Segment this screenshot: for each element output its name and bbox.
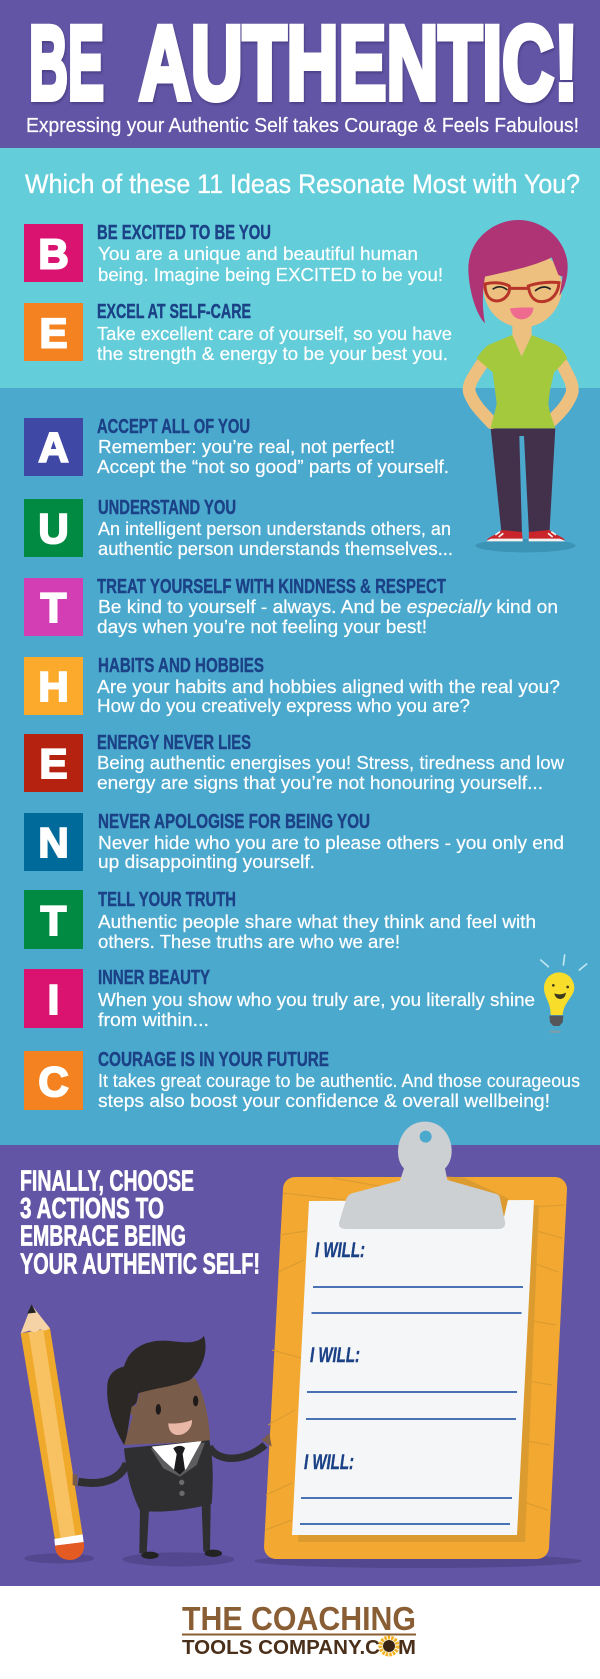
item: H: Are your habits and hobbies aligned with the real you? [97, 677, 560, 697]
item: T: T [41, 584, 67, 631]
item: N: N [38, 819, 69, 866]
item: E: ENERGY NEVER LIES [97, 731, 251, 754]
icon: light bulb [541, 955, 587, 1033]
heading: finally choose 3 actions: FINALLY, CHOOSE [20, 1166, 194, 1198]
item: T [24, 575, 558, 637]
item: C: C [38, 1058, 69, 1105]
paper sheet [292, 1200, 534, 1535]
item: T: T [41, 897, 67, 944]
item: E: Take excellent care of yourself, so you have [97, 324, 452, 344]
panel: header [0, 0, 600, 148]
icon: clipboard [254, 1122, 582, 1568]
item: T: others. These truths are who we are! [98, 932, 400, 952]
clip [339, 1122, 508, 1229]
item: T: TREAT YOURSELF WITH KINDNESS & RESPECT [97, 575, 446, 598]
item: A: Accept the “not so good” parts of yourself. [97, 457, 449, 477]
item: E: E [39, 740, 68, 787]
item: N [24, 810, 564, 872]
item: I [24, 966, 535, 1030]
item: C: It takes great courage to be authentic. And those courageous [98, 1071, 580, 1091]
heading: finally choose 3 actions: EMBRACE BEING [20, 1220, 186, 1252]
item: U: UNDERSTAND YOU [98, 496, 236, 519]
item: U [24, 496, 453, 559]
item: H: How do you creatively express who you are? [97, 696, 470, 716]
item: A [24, 415, 449, 477]
icon: sunflower O [380, 1638, 398, 1654]
panel: teal section [0, 148, 600, 388]
item: E [24, 731, 565, 793]
item: B: BE EXCITED TO BE YOU [97, 221, 271, 244]
item: T: Authentic people share what they think and feel with [98, 912, 536, 932]
icon: businessman [73, 1336, 272, 1566]
item: E: the strength & energy to be your best you. [97, 344, 448, 364]
item: E: EXCEL AT SELF-CARE [97, 300, 251, 323]
item: C: steps also boost your confidence & overall wellbeing! [98, 1091, 550, 1111]
item: T: days when you’re not feeling your best! [97, 617, 427, 637]
item: E: energy are signs that you’re not honouring yourself... [97, 773, 543, 793]
item: T [24, 888, 536, 952]
item: A: A [38, 424, 69, 471]
icon: clipboard: I WILL: [304, 1451, 354, 1474]
icon: clipboard: I WILL: [310, 1344, 360, 1367]
panel: footer logo [0, 1586, 600, 1679]
item: H: HABITS AND HOBBIES [98, 654, 264, 677]
item: T: Be kind to yourself - always. And be especially kind on [98, 597, 558, 617]
item: I: When you show who you truly are, you literally shine [98, 990, 535, 1010]
item: N: Never hide who you are to please others - you only end [98, 833, 564, 853]
item: U: An intelligent person understands others, an [98, 519, 451, 539]
logo top line: THE COACHING [182, 1600, 416, 1637]
item: B [24, 221, 443, 285]
item: B: You are a unique and beautiful human [98, 244, 418, 264]
item: E: E [39, 310, 68, 356]
item: A: ACCEPT ALL OF YOU [97, 415, 250, 438]
item: A: Remember: you’re real, not perfect! [98, 437, 395, 457]
item: T: TELL YOUR TRUTH [98, 888, 236, 911]
icon: pencil [21, 1304, 94, 1563]
panel: blue section [0, 388, 600, 1145]
heading: finally choose 3 actions [20, 1166, 260, 1280]
item: H: H [38, 663, 69, 710]
logo bottom line: TOOLS COMPANY.C [182, 1637, 380, 1659]
I will labels: I WILL: [315, 1239, 365, 1262]
subtitle: Expressing your Authentic Self takes Courage & Feels Fabulous! [26, 115, 579, 137]
heading: finally choose 3 actions: 3 ACTIONS TO [20, 1193, 164, 1225]
item: B: being. Imagine being EXCITED to be you! [98, 265, 443, 285]
item: I: INNER BEAUTY [98, 966, 210, 989]
item: E [24, 300, 452, 364]
item: I: from within... [98, 1010, 209, 1030]
item: E: Being authentic energises you! Stress, tiredness and low [97, 753, 565, 773]
item: C [24, 1048, 580, 1111]
title: BE [29, 5, 104, 122]
panel: purple action section [0, 1145, 600, 1586]
item: N: up disappointing yourself. [98, 852, 315, 872]
panel: footer logo: M [398, 1637, 416, 1659]
writing lines [300, 1287, 523, 1524]
item: H [24, 654, 560, 716]
icon: smiling woman with glasses [468, 220, 576, 552]
heading: finally choose 3 actions: YOUR AUTHENTIC SELF! [20, 1248, 260, 1280]
item: C: COURAGE IS IN YOUR FUTURE [98, 1048, 329, 1071]
item: N: NEVER APOLOGISE FOR BEING YOU [98, 810, 370, 833]
item: B: B [38, 230, 69, 278]
item: U: U [38, 505, 69, 552]
item: U: authentic person understands themselves... [98, 539, 453, 559]
item: I: I [48, 976, 59, 1023]
